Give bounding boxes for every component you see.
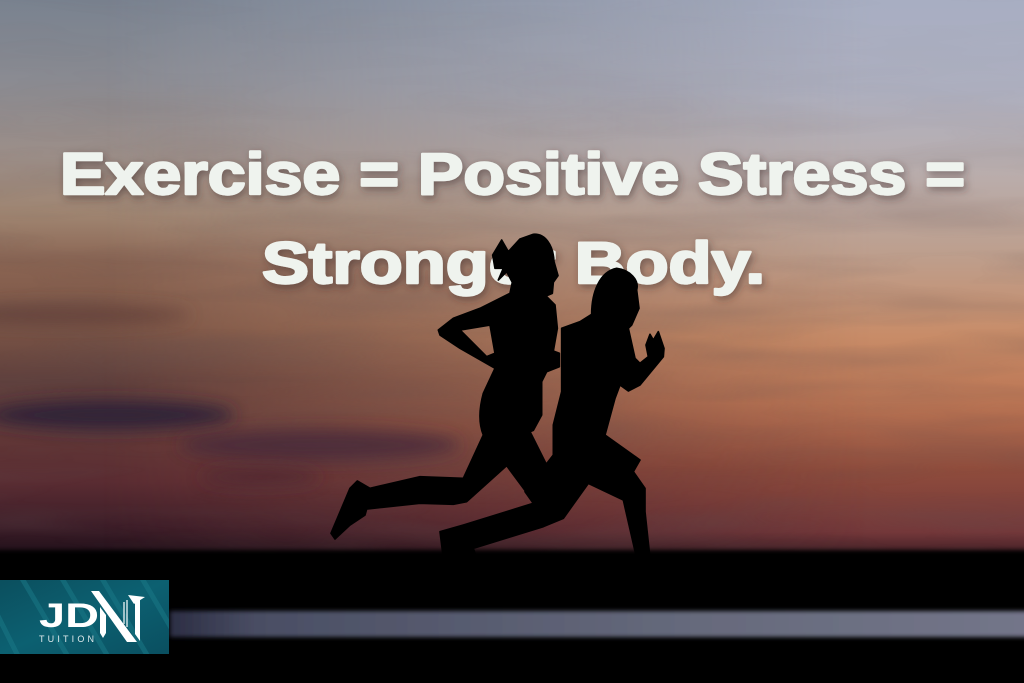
logo letters: JD [39, 597, 99, 635]
road reflection band [170, 611, 1024, 637]
logo N with pencil [91, 591, 140, 642]
logo cap [128, 595, 145, 604]
logo subtitle: TUITION [39, 634, 95, 644]
runners silhouette [331, 234, 693, 590]
logo: JDN Tuition [0, 580, 169, 654]
title [60, 142, 965, 296]
dark ground and horizon [0, 550, 1024, 683]
runner: man [440, 268, 693, 590]
runner: woman [331, 234, 559, 539]
title: Exercise = Positive Stress = [60, 142, 965, 207]
title: Stronger Body. [262, 231, 765, 296]
